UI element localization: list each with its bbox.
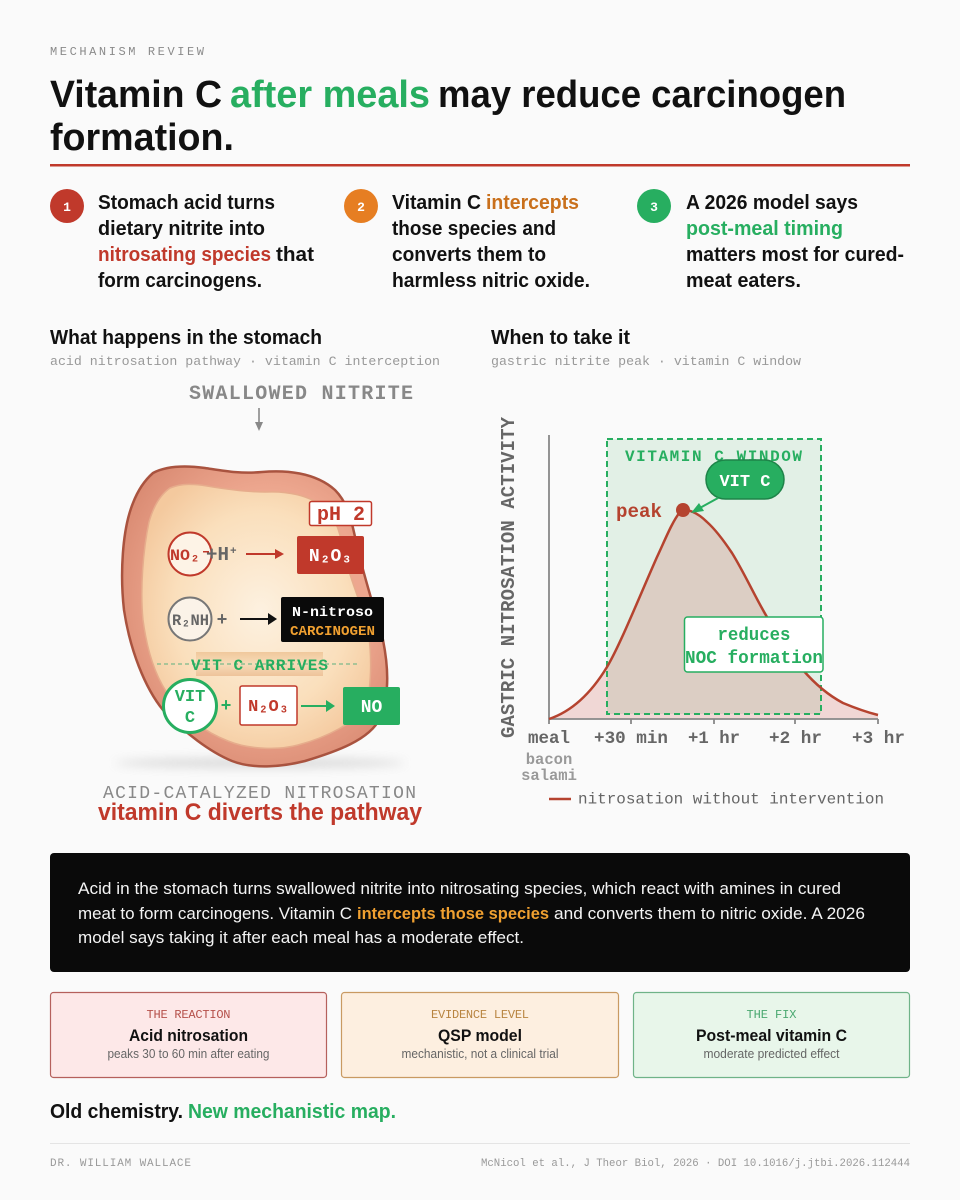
stomach shape	[122, 467, 387, 766]
badge 1	[50, 189, 84, 223]
x axis labels: +2 hr	[769, 729, 822, 749]
diagram captions	[98, 784, 423, 826]
plus: +	[217, 611, 227, 631]
badge 3: 3	[650, 200, 658, 215]
footer: DR. WILLIAM WALLACE	[50, 1158, 191, 1170]
swallowed nitrite label: SWALLOWED NITRITE	[189, 383, 413, 406]
step 1 text: form carcinogens.	[98, 270, 262, 292]
step 2 text: those species and	[392, 218, 556, 240]
nitrite circle	[168, 532, 212, 576]
step 1 text: Stomach acid turns	[98, 192, 275, 214]
badge 2: 2	[357, 200, 365, 215]
card: the reaction: THE REACTION	[146, 1008, 230, 1022]
vit c arrives label: VIT C ARRIVES	[191, 657, 328, 675]
diagram captions: ACID-CATALYZED NITROSATION	[103, 784, 416, 804]
card: evidence level	[342, 992, 618, 1078]
arrow: red	[246, 549, 284, 559]
reaction row 2	[168, 597, 384, 642]
title	[50, 74, 846, 159]
step 3 text: meat eaters.	[686, 270, 801, 292]
food labels: salami	[521, 767, 577, 785]
NO box: NO	[361, 698, 382, 718]
card: the reaction: peaks 30 to 60 min after eating	[108, 1047, 270, 1061]
window border	[607, 439, 821, 714]
heading: timing: gastric nitrite peak · vitamin C window	[491, 354, 801, 369]
x axis labels: meal	[528, 729, 570, 749]
heading: stomach: What happens in the stomach	[50, 327, 322, 349]
summary panel: model says taking it after each meal has a moderate effect.	[78, 928, 524, 947]
food labels	[521, 751, 577, 785]
reaction row 3	[164, 680, 400, 732]
step 2 text: intercepts	[486, 192, 579, 214]
title: after meals	[230, 74, 430, 116]
reduces callout: reduces	[718, 626, 790, 646]
closing line: Old chemistry.	[50, 1101, 183, 1123]
heading: stomach: acid nitrosation pathway · vitamin C interception	[50, 354, 440, 369]
step 1 text	[98, 192, 314, 292]
x axis labels	[528, 729, 905, 749]
title: Vitamin C	[50, 74, 222, 116]
step 1 text: dietary nitrite into	[98, 218, 265, 240]
step 2 text: Vitamin C	[392, 192, 481, 214]
food labels: bacon	[526, 751, 572, 769]
title: formation.	[50, 117, 234, 159]
plus green: +	[221, 697, 231, 717]
carcinogen box	[281, 597, 384, 642]
summary panel: and converts them to nitric oxide. A 2026	[554, 904, 865, 923]
vit c pill	[706, 460, 784, 499]
axes	[549, 435, 878, 724]
badge 1: 1	[63, 200, 71, 215]
closing line	[50, 1101, 396, 1123]
closing line: New mechanistic map.	[188, 1101, 396, 1123]
card: the fix	[634, 992, 910, 1078]
NO box	[343, 687, 400, 725]
summary panel	[50, 853, 910, 972]
vit c arrives label	[157, 652, 360, 676]
step 1 text: that	[276, 244, 314, 266]
step 1	[50, 189, 314, 292]
N2O3 red box: N₂O₃	[309, 547, 352, 567]
arrow: vit c to peak	[691, 498, 718, 513]
y axis label: GASTRIC NITROSATION ACTIVITY	[498, 416, 520, 738]
peak marker: peak	[616, 501, 662, 523]
arrow: black	[240, 613, 277, 625]
card: evidence level: EVIDENCE LEVEL	[431, 1008, 529, 1022]
N2O3 white box: N₂O₃	[248, 698, 289, 717]
heading: stomach	[50, 327, 440, 369]
x axis labels: +30 min	[594, 729, 668, 749]
card: evidence level: mechanistic, not a clinical trial	[402, 1047, 558, 1061]
N2O3 white box	[240, 686, 297, 725]
peak marker	[616, 501, 690, 523]
plus H: +	[230, 546, 237, 558]
vit c circle: VIT	[175, 688, 205, 707]
step 2	[344, 189, 590, 292]
N2O3 red box	[297, 536, 364, 574]
area under curve	[549, 510, 878, 719]
stomach diagram	[98, 383, 423, 826]
pH 2 tag: pH 2	[317, 504, 365, 527]
x axis labels: +3 hr	[852, 729, 905, 749]
pH 2 tag	[310, 502, 372, 527]
badge 3	[637, 189, 671, 223]
card: the fix: THE FIX	[746, 1008, 796, 1022]
step 2 text	[392, 192, 590, 292]
arrow: swallowed	[255, 408, 263, 431]
carcinogen box: CARCINOGEN	[290, 624, 375, 640]
arrow: green	[301, 700, 335, 712]
card: the reaction: Acid nitrosation	[129, 1027, 248, 1045]
vitamin c window	[607, 439, 821, 714]
eyebrow: MECHANISM REVIEW	[50, 45, 205, 59]
heading: timing	[491, 327, 801, 369]
vit c circle: C	[185, 709, 195, 728]
reduces callout: NOC formation	[685, 649, 823, 669]
card: the fix: moderate predicted effect	[704, 1047, 840, 1061]
legend: nitrosation without intervention	[578, 790, 884, 808]
nitrite circle: NO₂	[170, 547, 200, 565]
card: the reaction	[50, 992, 326, 1078]
step 2 text: converts them to	[392, 244, 546, 266]
carcinogen box: N-nitroso	[292, 605, 373, 621]
footer: McNicol et al., J Theor Biol, 2026 · DOI 10.1016/j.jtbi.2026.112444	[481, 1158, 910, 1170]
step 3 text: post-meal timing	[686, 218, 843, 240]
footer	[50, 1158, 910, 1170]
nitrosation curve	[549, 510, 878, 719]
window label: VITAMIN C WINDOW	[625, 448, 802, 466]
vit c circle	[164, 680, 216, 732]
summary panel: intercepts those species	[357, 904, 549, 923]
shadow	[115, 758, 405, 768]
reduces callout	[684, 617, 823, 672]
amine circle	[168, 598, 212, 640]
heading: timing: When to take it	[491, 327, 630, 349]
badge 2	[344, 189, 378, 223]
amine circle: R₂NH	[172, 612, 209, 630]
step 3 text: A 2026 model says	[686, 192, 858, 214]
title: may reduce carcinogen	[438, 74, 846, 116]
step 3 text	[686, 192, 904, 292]
summary panel: meat to form carcinogens. Vitamin C	[78, 904, 352, 923]
timing chart	[498, 416, 905, 808]
summary panel: Acid in the stomach turns swallowed nitrite into nitrosating species, which react with amines in cured	[78, 879, 841, 898]
reaction row 1	[168, 532, 364, 576]
diagram captions: vitamin C diverts the pathway	[98, 799, 423, 826]
plus H: +H	[206, 544, 229, 566]
step 3	[637, 189, 904, 292]
step 1 text: nitrosating species	[98, 244, 271, 266]
card: the fix: Post-meal vitamin C	[696, 1027, 847, 1045]
card: evidence level: QSP model	[438, 1027, 522, 1045]
step 2 text: harmless nitric oxide.	[392, 270, 590, 292]
step 3 text: matters most for cured-	[686, 244, 904, 266]
vit c pill: VIT C	[719, 473, 771, 492]
x axis labels: +1 hr	[688, 729, 740, 749]
